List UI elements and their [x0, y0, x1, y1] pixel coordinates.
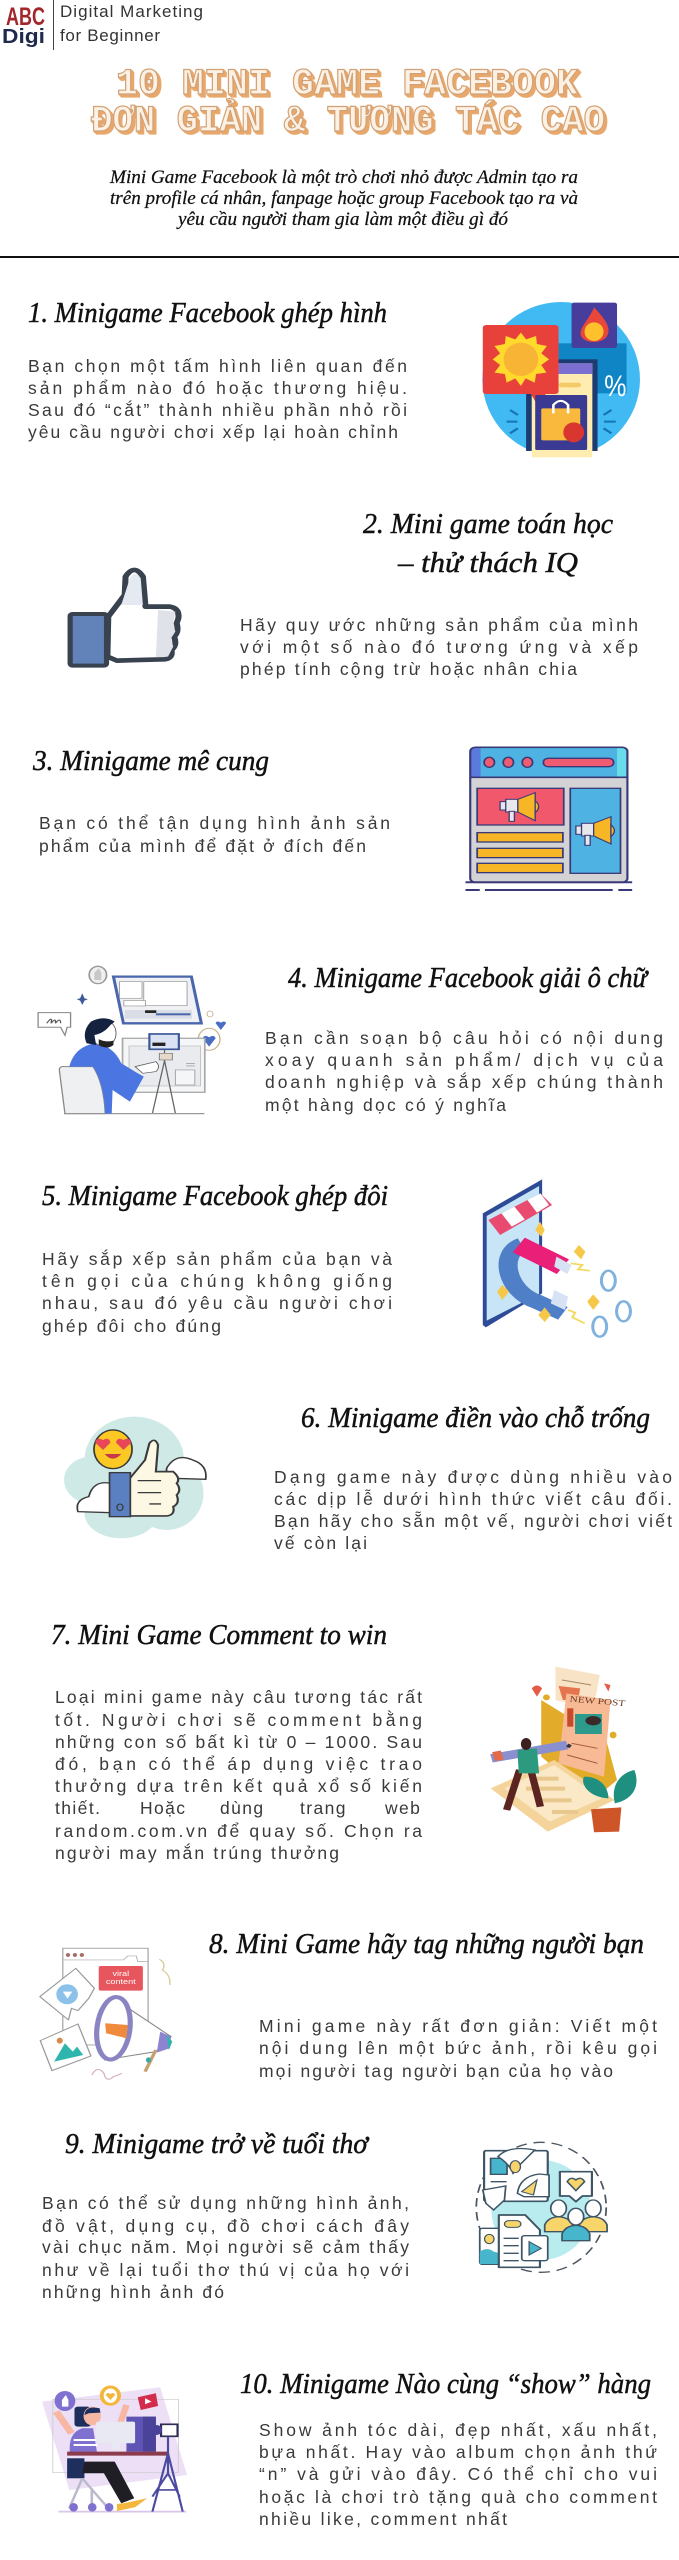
- icon: shopping promo circle: %: [604, 369, 626, 402]
- icon: thumbs up with heart-eyes emoji: [64, 1417, 206, 1538]
- text 7: trang: [300, 1798, 347, 1818]
- icon: person filming at desk: [38, 966, 226, 1114]
- icon: memories collage: [476, 2142, 607, 2272]
- text 7: web: [384, 1798, 421, 1818]
- icon: magnet and phone shop: [483, 1179, 630, 1337]
- heading 7: 7. Mini Game Comment to win: [51, 1619, 387, 1651]
- text 9: [42, 2193, 409, 2302]
- icon: viral content megaphone: viral: [112, 1970, 129, 1978]
- text 10: nhiều like, comment nhất: [259, 2509, 507, 2529]
- text 2: với một số nào đó tương ứng và xếp: [240, 637, 638, 657]
- icon: streamer at desk: [42, 2387, 187, 2512]
- heading 8: 8. Mini Game hãy tag những người bạn: [209, 1928, 644, 1960]
- text 6: vế còn lại: [274, 1533, 367, 1553]
- panel: game 9: [42, 2128, 607, 2302]
- text 3: Bạn có thể tận dụng hình ảnh sản: [39, 813, 390, 833]
- text 8: [259, 2016, 657, 2081]
- text 2: [240, 615, 638, 679]
- heading 2: – thử thách IQ: [397, 547, 578, 579]
- icon: laptop new post with pencil: [491, 1667, 637, 1832]
- text 7: thiết.: [55, 1798, 101, 1818]
- text 9: Bạn có thể sử dụng những hình ảnh,: [42, 2193, 409, 2213]
- text 7: những con số bất kì từ 0 – 1000. Sau: [55, 1732, 422, 1752]
- text 5: nhau, sau đó yêu cầu người chơi: [42, 1293, 392, 1313]
- text 2: phép tính cộng trừ hoặc nhân chia: [240, 659, 577, 679]
- text 5: [42, 1248, 392, 1336]
- text 1: yêu cầu người chơi xếp lại hoàn chỉnh: [28, 422, 398, 442]
- text 8: mọi người tag người bạn của họ vào: [259, 2061, 613, 2081]
- text 7: người may mắn trúng thưởng: [55, 1842, 339, 1863]
- panel: game 7: [51, 1619, 637, 1863]
- heading 2: [363, 508, 613, 579]
- text 7: [55, 1687, 422, 1863]
- text 7: đó, bạn có thể áp dụng việc trao: [55, 1754, 422, 1774]
- heading 5: 5. Minigame Facebook ghép đôi: [42, 1180, 388, 1212]
- intro text: yêu cầu người tham gia làm một điều gì đó: [176, 209, 508, 230]
- text 7: random.com.vn để quay số. Chọn ra: [55, 1821, 422, 1841]
- text 7: tốt. Người chơi sẽ comment bằng: [55, 1709, 422, 1730]
- text 3: [39, 813, 390, 856]
- text 7: Loại mini game này câu tương tác rất: [55, 1687, 422, 1707]
- logo wordmark: [2, 3, 45, 48]
- text 10: “n” và gửi vào đây. Có thể chỉ cho vui: [259, 2464, 657, 2484]
- text 9: đồ vật, dụng cụ, đồ chơi cách đây: [42, 2216, 409, 2236]
- text 10: [259, 2420, 657, 2529]
- title: ĐƠN GIẢN & TƯƠNG TÁC CAO: [91, 99, 605, 143]
- text 6: Dạng game này được dùng nhiều vào: [274, 1467, 672, 1487]
- text 1: Bạn chọn một tấm hình liên quan đến: [28, 356, 407, 376]
- panel: game 1: [28, 297, 640, 457]
- heading 10: 10. Minigame Nào cùng “show” hàng: [240, 2368, 651, 2400]
- icon: viral content megaphone: content: [106, 1978, 137, 1986]
- text 9: những hình ảnh đó: [42, 2282, 224, 2302]
- logo wordmark: Digi: [2, 26, 45, 48]
- logo tagline: [60, 2, 203, 45]
- text 3: phẩm của mình để đặt ở đích đến: [39, 836, 366, 856]
- text 2: Hãy quy ước những sản phẩm của mình: [240, 615, 638, 635]
- title: [91, 64, 605, 143]
- text 1: sản phẩm nào đó hoặc thương hiệu.: [28, 378, 407, 398]
- text 5: ghép đôi cho đúng: [42, 1316, 221, 1336]
- text 4: một hàng dọc có ý nghĩa: [265, 1095, 506, 1115]
- icon: thumbs up: [70, 570, 179, 666]
- text 4: [265, 1028, 663, 1115]
- text 5: tên gọi của chúng không giống: [42, 1271, 392, 1291]
- icon: shopping promo circle: [482, 302, 640, 457]
- logo wordmark: ABC: [6, 3, 45, 31]
- logo tagline: Digital Marketing: [60, 2, 203, 21]
- text 1: Sau đó “cắt” thành nhiều phần nhỏ rồi: [28, 399, 407, 420]
- panel: game 4: [38, 962, 663, 1115]
- heading 6: 6. Minigame điền vào chỗ trống: [301, 1402, 650, 1434]
- heading 3: 3. Minigame mê cung: [32, 745, 269, 777]
- heading 1: 1. Minigame Facebook ghép hình: [28, 297, 387, 329]
- text 7: thưởng dựa trên kết quả xổ số kiến: [55, 1776, 422, 1796]
- heading 4: 4. Minigame Facebook giải ô chữ: [288, 962, 649, 994]
- icon: browser window with megaphones: [465, 747, 632, 890]
- icon: viral content megaphone: [40, 1948, 172, 2079]
- text 9: vài chục năm. Mọi người sẽ cảm thấy: [42, 2237, 409, 2257]
- panel: game 10: [42, 2368, 657, 2529]
- text 8: nội dung lên một bức ảnh, rồi kêu gọi: [259, 2038, 657, 2058]
- intro text: [109, 167, 578, 230]
- panel: game 8: [40, 1928, 657, 2081]
- text 10: Show ảnh tóc dài, đẹp nhất, xấu nhất,: [259, 2420, 657, 2440]
- heading 2: 2. Mini game toán học: [363, 508, 613, 540]
- panel: game 5: [42, 1179, 630, 1337]
- text 6: các dịp lễ dưới hình thức viết câu đối.: [274, 1488, 672, 1509]
- panel: game 6: [64, 1402, 672, 1553]
- text 6: [274, 1467, 672, 1553]
- intro text: trên profile cá nhân, fanpage hoặc group Facebook tạo ra và: [110, 188, 578, 209]
- logo tagline: for Beginner: [60, 26, 160, 45]
- text 5: Hãy sắp xếp sản phẩm của bạn và: [42, 1248, 392, 1269]
- panel: game 3: [32, 745, 632, 890]
- text 7: Hoặc: [140, 1798, 186, 1818]
- text 6: Bạn hãy cho sẵn một vế, người chơi viết: [274, 1511, 672, 1531]
- text 10: hoặc là chơi trò tặng quà cho comment: [259, 2487, 657, 2507]
- icon: laptop new post with pencil: NEW POST: [569, 1695, 626, 1709]
- text 4: xoay quanh sản phẩm/ dịch vụ của: [265, 1050, 663, 1070]
- panel: game 2: [70, 508, 638, 679]
- text 4: Bạn cần soạn bộ câu hỏi có nội dung: [265, 1028, 663, 1048]
- text 9: như về lại tuổi thơ thú vị của họ với: [42, 2260, 409, 2280]
- text 1: [28, 356, 407, 442]
- text 10: bựa nhất. Hay vào album chọn ảnh thứ: [259, 2442, 657, 2462]
- intro text: Mini Game Facebook là một trò chơi nhỏ được Admin tạo ra: [109, 167, 578, 188]
- heading 9: 9. Minigame trở về tuổi thơ: [65, 2128, 369, 2160]
- text 7: dùng: [220, 1798, 265, 1818]
- text 4: doanh nghiệp và sắp xếp chúng thành: [265, 1071, 663, 1092]
- text 8: Mini game này rất đơn giản: Viết một: [259, 2016, 657, 2036]
- title: 10 MINI GAME FACEBOOK: [116, 64, 579, 106]
- logo header: [2, 0, 203, 50]
